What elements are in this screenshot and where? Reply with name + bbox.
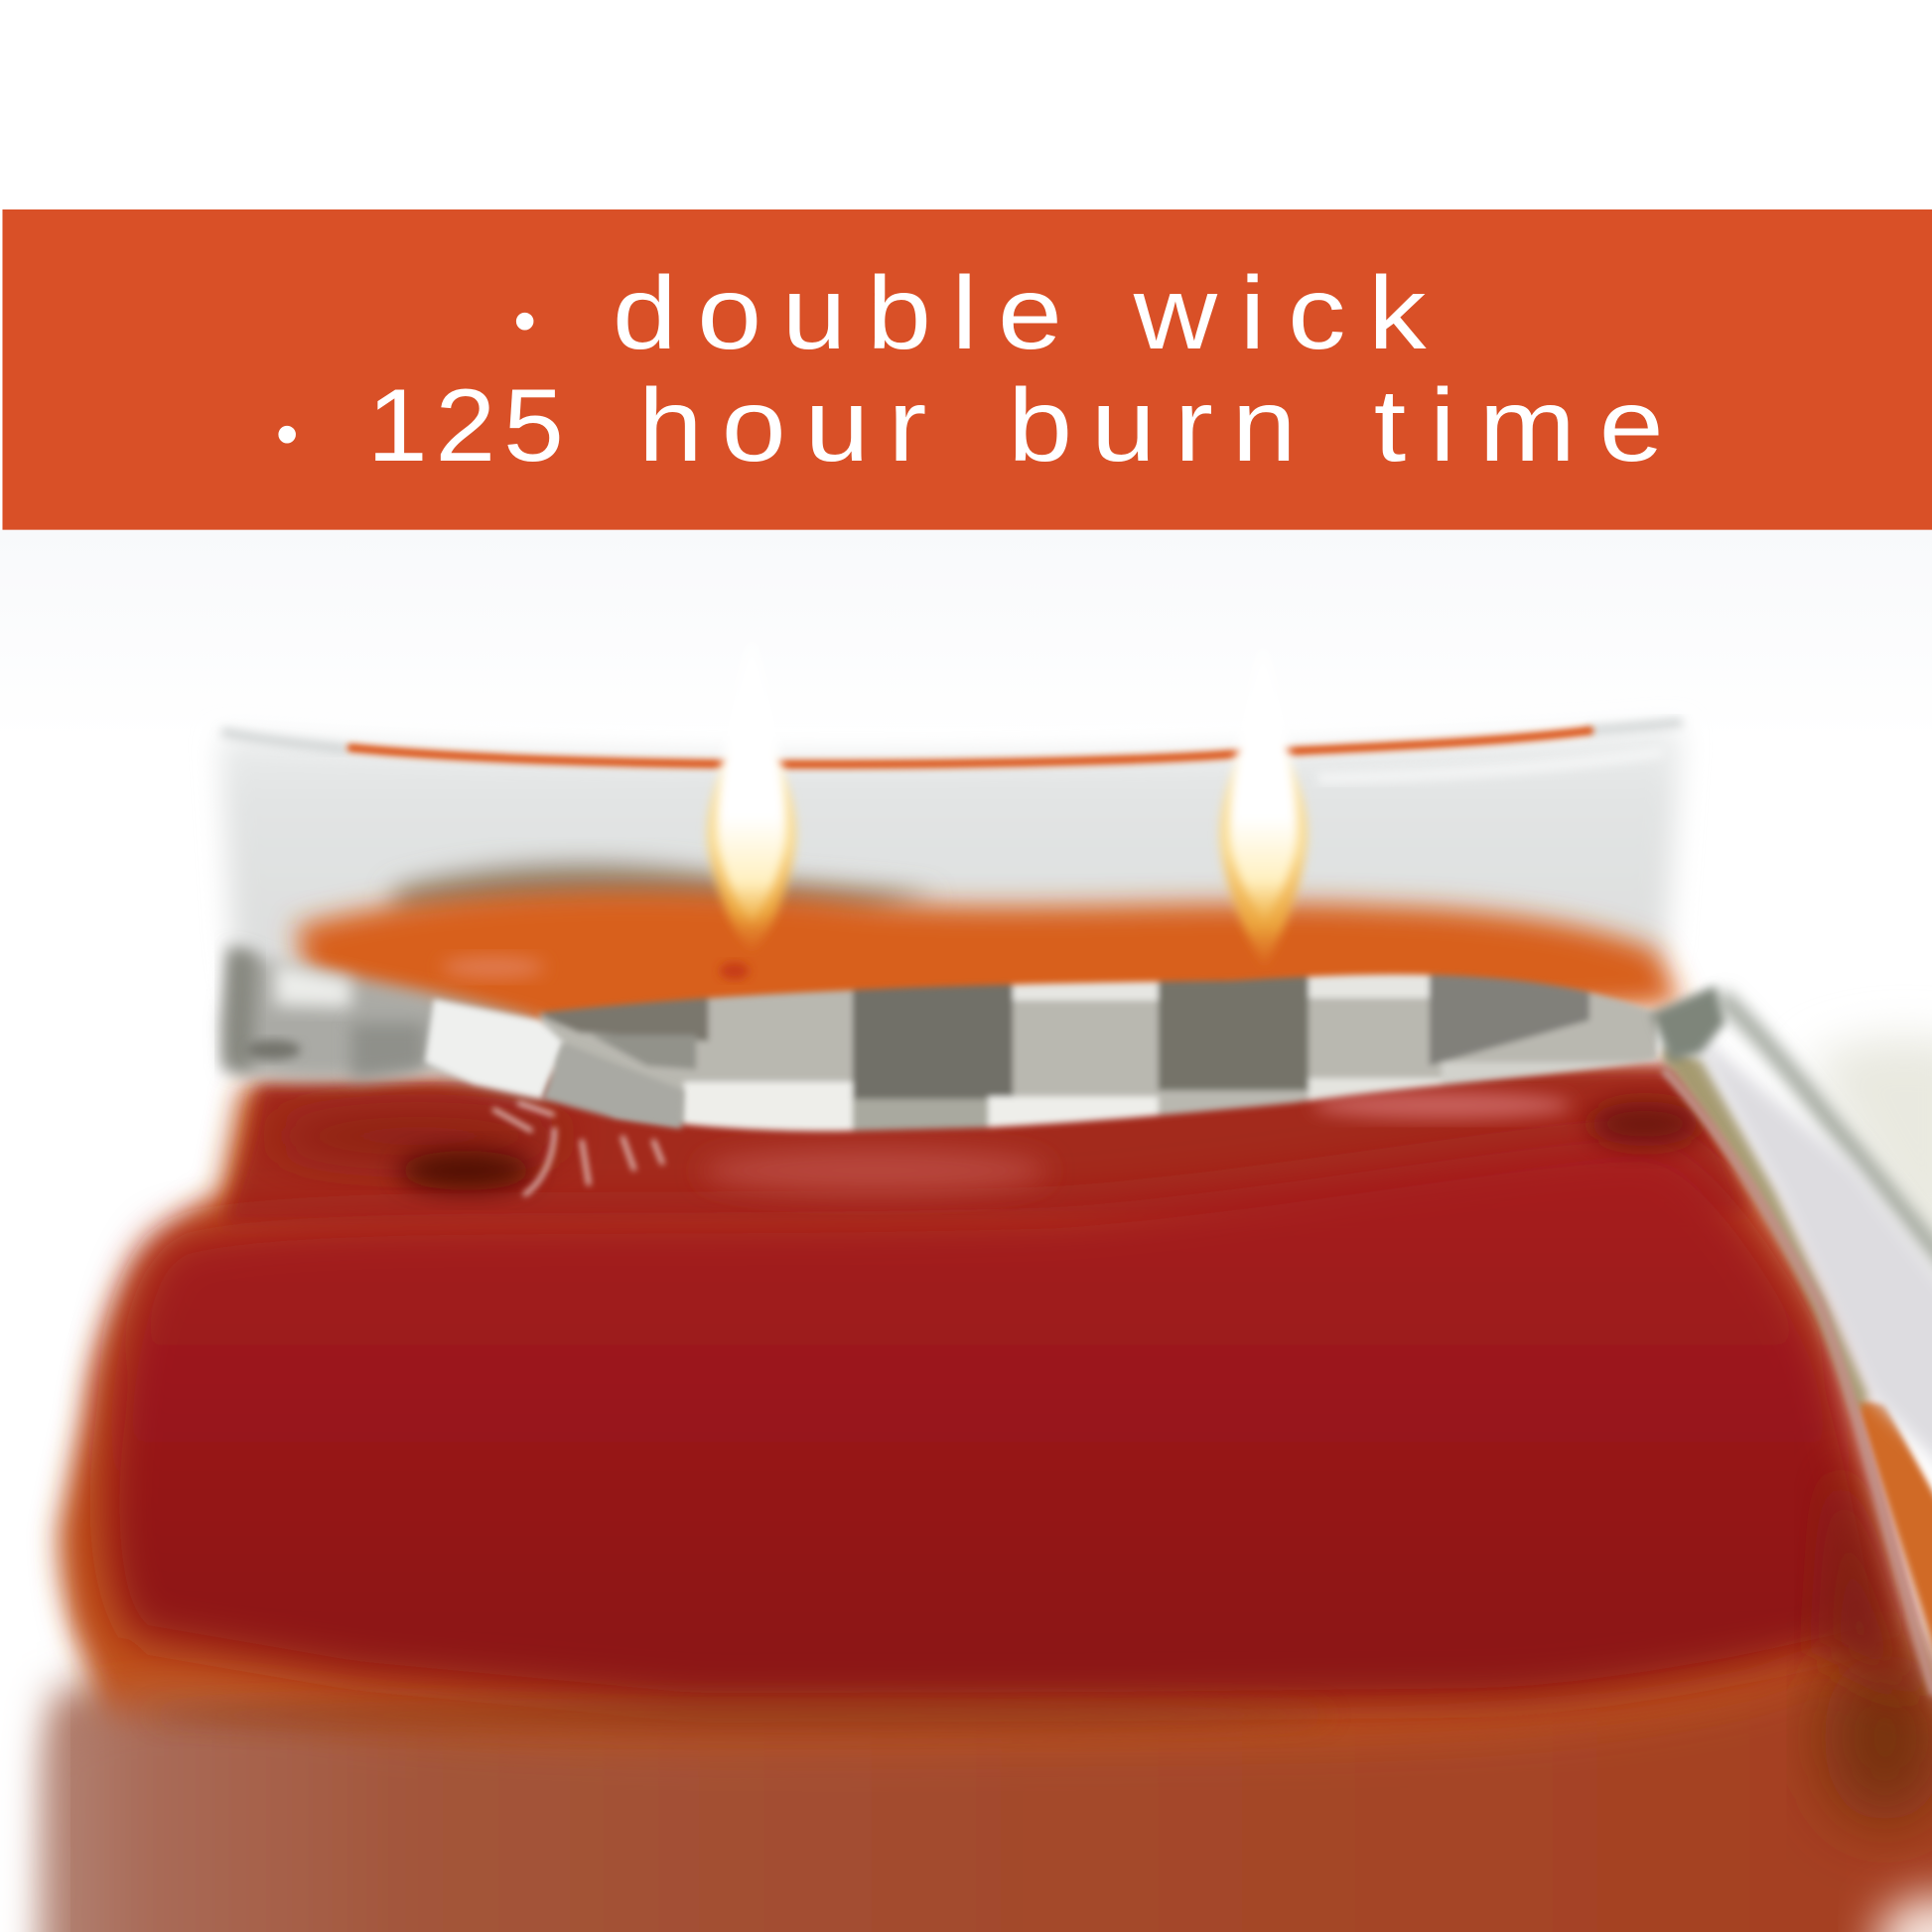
feature: double wick: double	[613, 256, 1062, 371]
frayed threads	[492, 1103, 663, 1195]
right flame halo	[1220, 733, 1308, 967]
shoulder shadow	[221, 1066, 1749, 1226]
shoulder highlight	[702, 1149, 1047, 1192]
glass rim and upper jar	[219, 722, 1682, 1041]
right side red-brown edge	[1824, 1453, 1922, 1701]
flap soft base	[221, 949, 542, 1099]
white bottom band	[684, 1082, 853, 1140]
gray diagonal panel	[542, 1042, 684, 1129]
flame: right	[1220, 647, 1308, 967]
wax rim line	[351, 731, 1589, 764]
dark shadow under ribbon	[398, 1151, 533, 1190]
candle photo	[0, 640, 1932, 1932]
dark shadow on right shoulder	[1589, 1102, 1701, 1146]
tail orange strip	[1855, 1399, 1932, 1725]
flap dark left strip	[224, 946, 256, 1072]
band base	[540, 975, 1657, 1131]
left flame halo	[707, 740, 796, 951]
bullet point two: •	[276, 398, 298, 470]
left edge white fade	[0, 1601, 37, 1932]
white top band	[1013, 973, 1159, 1001]
smoky residue	[394, 865, 936, 918]
jar body	[58, 1072, 1932, 1849]
orange banner	[2, 209, 1932, 530]
feature: burn time: burn	[1008, 368, 1297, 483]
red wax band	[105, 1140, 1891, 1708]
ribbon main band	[540, 961, 1657, 1140]
pale lower jar edge	[25, 1651, 617, 1932]
banner background	[2, 209, 1932, 530]
feature: burn time	[367, 367, 1664, 483]
tail olive band	[1663, 1047, 1870, 1412]
bullet point one: •	[513, 285, 536, 356]
lower wax band	[25, 1667, 1932, 1932]
gingham ribbon	[221, 946, 1932, 1725]
right side brown shading	[1824, 1651, 1932, 1824]
ribbon tail	[1663, 996, 1932, 1725]
glass wall	[219, 727, 1682, 998]
feature: burn time: time	[1374, 368, 1664, 483]
warm shading above lower band	[148, 1698, 1330, 1732]
right flame core	[1229, 647, 1298, 921]
flap gray patch	[351, 1023, 425, 1079]
left flame core	[717, 640, 786, 924]
dark stripes	[542, 986, 709, 1041]
flap white patch	[275, 964, 351, 1008]
feature: burn time: 125	[367, 367, 564, 483]
rim highlight	[1318, 752, 1663, 778]
flap dark smudge	[246, 1039, 301, 1059]
white diagonal panel	[425, 1000, 563, 1099]
feature: burn time: hour	[638, 368, 926, 483]
photo backdrop	[0, 530, 1932, 740]
left wick ember	[720, 962, 750, 980]
wax surface	[296, 890, 1682, 1041]
tag flowers at right edge	[1811, 1036, 1932, 1307]
ribbon knot	[1651, 986, 1725, 1062]
highlight on right shoulder	[1312, 1092, 1571, 1119]
ribbon left flap	[221, 946, 684, 1129]
flame: left	[707, 640, 796, 980]
shoulder mottling	[271, 1109, 567, 1164]
feature: double wick	[613, 256, 1427, 371]
tail outer shadow edge	[1721, 996, 1932, 1282]
tail white band	[1688, 1026, 1932, 1484]
tail pink edge line	[1663, 1069, 1932, 1696]
bottom right fade	[1875, 1895, 1932, 1932]
feature: double wick: wick	[1133, 256, 1427, 371]
glass rim outline	[221, 722, 1682, 750]
wax surface light spot	[441, 956, 545, 978]
